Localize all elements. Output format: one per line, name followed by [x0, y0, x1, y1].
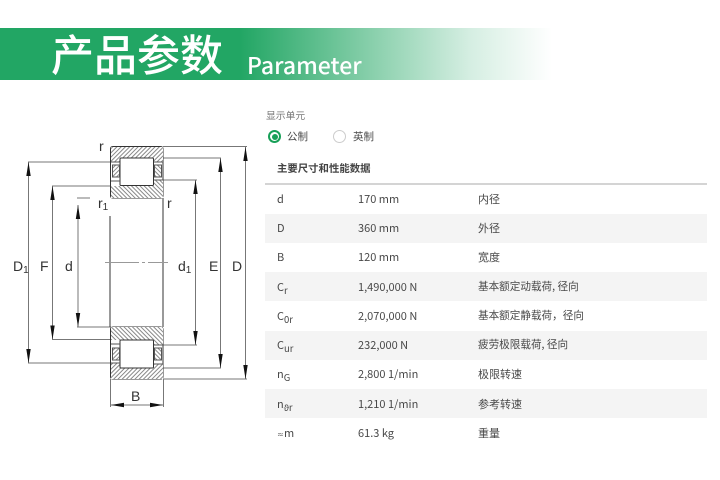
row: d: 170 mm: [358, 191, 399, 207]
table top rule: [265, 183, 707, 185]
radio: imperial: 英制: [353, 129, 374, 144]
row: C0r: C0r: [277, 308, 293, 326]
dimension labels: d: [178, 258, 186, 274]
row: nG: nG: [277, 366, 290, 384]
dimension lines: [28, 146, 247, 407]
arrowheads: [26, 147, 248, 407]
row: D: 360 mm: [358, 220, 399, 236]
bottom bearing section: [110, 327, 163, 379]
row: m: 重量: [478, 425, 500, 441]
row: D: 外径: [478, 220, 500, 236]
table heading: 主要尺寸和性能数据: [277, 160, 371, 175]
row: n8r: 1,210 1/min: [358, 396, 418, 412]
row: d: 内径: [478, 191, 500, 207]
row: B: 宽度: [478, 249, 500, 265]
row: B: B: [277, 249, 284, 265]
row: Cur: Cur: [277, 337, 293, 355]
bearing diagram: [13, 138, 248, 408]
radio: imperial: [333, 129, 374, 144]
row: D: [265, 214, 707, 243]
row: C0r: 基本额定静载荷，径向: [478, 308, 584, 323]
top bearing section: [110, 146, 163, 198]
dimension labels: D: [13, 258, 23, 274]
shaft lines: [110, 198, 163, 327]
row: m: 61.3 kg: [358, 425, 394, 441]
row: Cur: [265, 331, 707, 360]
row: Cr: 1,490,000 N: [358, 279, 417, 295]
dimension labels: r: [99, 138, 104, 154]
dimension labels: r: [167, 195, 172, 211]
row: D: D: [277, 220, 285, 236]
dimension labels: 1: [186, 265, 192, 276]
row: nG: 极限转速: [478, 366, 522, 382]
row: Cur: 疲劳极限载荷, 径向: [478, 337, 568, 352]
subtitle: Parameter: [247, 47, 362, 81]
dimension labels: F: [40, 258, 49, 274]
dimension labels: d: [65, 258, 73, 274]
row: n8r: [265, 389, 707, 418]
row: C0r: 2,070,000 N: [358, 308, 417, 324]
row: m: [277, 425, 500, 441]
radio: metric: [268, 129, 308, 144]
header banner: [0, 28, 552, 80]
dimension labels: D: [232, 258, 242, 274]
dimension labels: [13, 138, 242, 404]
dimension labels: B: [131, 388, 140, 404]
title: 产品参数: [51, 22, 223, 84]
row: Cur: 232,000 N: [358, 337, 408, 353]
row: n8r: 参考转速: [478, 396, 522, 412]
row: nG: 2,800 1/min: [358, 366, 418, 382]
row: d: [277, 191, 500, 207]
unit label: 显示单元: [266, 108, 305, 122]
dimension labels: 1: [23, 265, 29, 276]
radio: metric: 公制: [287, 129, 308, 144]
dimension labels: E: [209, 258, 218, 274]
row: Cr: [265, 272, 707, 301]
dimension labels: r: [98, 195, 103, 211]
row: Cr: Cr: [277, 279, 288, 297]
row: B: [277, 249, 500, 265]
row: m: ≈m: [277, 425, 294, 441]
row: n8r: nϑr: [277, 396, 293, 414]
row: Cr: 基本额定动载荷, 径向: [478, 279, 579, 294]
row: d: d: [277, 191, 284, 207]
dimension labels: 1: [103, 202, 109, 213]
row: nG: [277, 366, 522, 384]
centre line: [105, 262, 168, 264]
row: B: 120 mm: [358, 249, 399, 265]
row: C0r: [277, 308, 584, 326]
